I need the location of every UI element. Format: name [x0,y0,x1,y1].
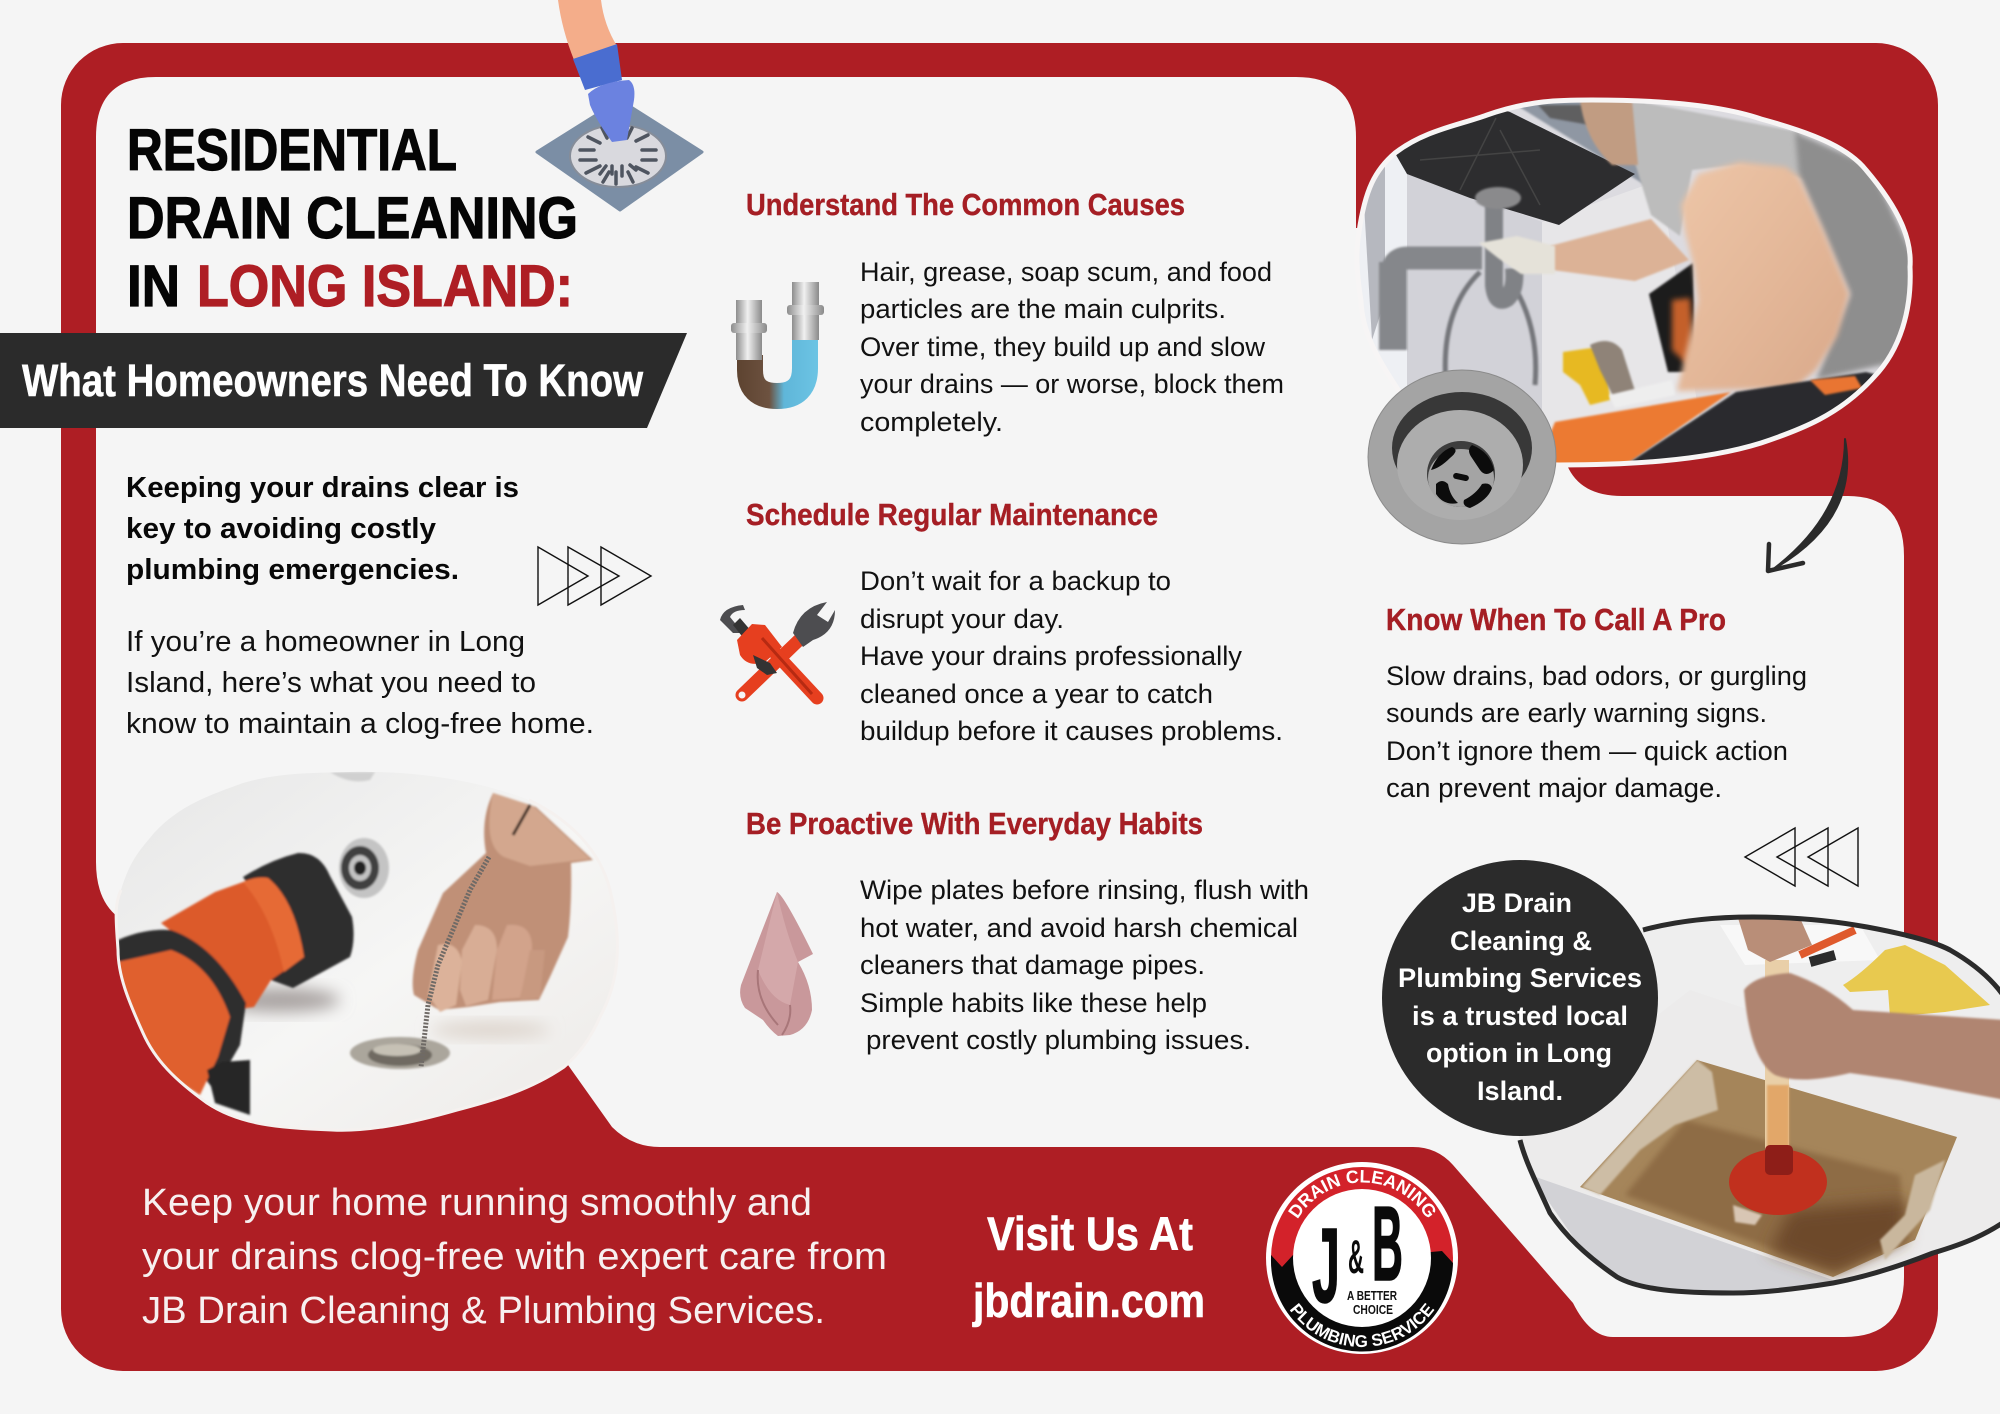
section: regular maintenance [720,497,1283,746]
text block: intro: Island, here’s what you need to [126,667,536,699]
text block: intro [126,626,594,740]
text block: lead: Keeping your drains clear is [126,472,519,504]
body: maintenance: cleaned once a year to catch [860,679,1213,709]
title: LONG ISLAND: [197,254,573,319]
body: causes: Hair, grease, soap scum, and food [860,257,1272,287]
photo: snake cable in sink drain [118,772,606,1129]
body: call a pro: sounds are early warning signs. [1386,698,1767,728]
logo: J&B Drain Cleaning & Plumbing Service: J [1312,1207,1340,1325]
icon: pink cloth [740,892,813,1036]
banner text: What Homeowners Need To Know [22,355,644,406]
text block: closing message: JB Drain Cleaning & Plumbing Services. [142,1290,825,1332]
title [127,118,578,319]
call to action: website: jbdrain.com [972,1274,1205,1327]
title: IN [127,254,180,319]
body: causes: completely. [860,407,1003,437]
body: habits: Wipe plates before rinsing, flush with [860,875,1309,905]
callout: trusted local option: Cleaning & [1450,926,1592,956]
body: habits: hot water, and avoid harsh chemical [860,913,1298,943]
body: habits [860,875,1309,1055]
callout: trusted local option: is a trusted local [1412,1001,1628,1031]
body: call a pro: can prevent major damage. [1386,773,1722,803]
body: maintenance: Have your drains professionally [860,641,1243,671]
logo: J&B Drain Cleaning & Plumbing Service: & [1348,1230,1364,1283]
logo: J&B Drain Cleaning & Plumbing Service [1266,1162,1458,1354]
logo: J&B Drain Cleaning & Plumbing Service: PLUMBING SERVICE [1290,1302,1434,1348]
logo: J&B Drain Cleaning & Plumbing Service: CHOICE [1353,1302,1393,1317]
heading: call a pro: Know When To Call A Pro [1386,602,1726,637]
title: DRAIN CLEANING [127,186,578,251]
icon: crossed wrenches [720,602,835,698]
logo: J&B Drain Cleaning & Plumbing Service: DRAIN CLEANING [1288,1170,1436,1218]
callout: trusted local option: Island. [1477,1076,1563,1106]
body: maintenance [860,566,1283,746]
icon: sink drain [1368,370,1556,544]
logo: J&B Drain Cleaning & Plumbing Service: B [1372,1185,1403,1303]
text block: closing message [142,1182,887,1332]
section: know when to call a pro [1386,602,1807,803]
text block: intro: If you’re a homeowner in Long [126,626,525,658]
body: habits: Simple habits like these help [860,988,1207,1018]
callout: trusted local option: option in Long [1426,1038,1612,1068]
call to action: website [972,1207,1205,1327]
call to action: website: Visit Us At [987,1207,1193,1260]
text block: intro: know to maintain a clog-free home. [126,708,594,740]
icon: triple arrows left [1745,828,1858,886]
icon: gloved hand on floor drain [537,0,702,210]
heading: maintenance: Schedule Regular Maintenance [746,497,1158,532]
banner [0,333,687,428]
section: common causes [731,187,1284,437]
body: causes: Over time, they build up and slow [860,332,1266,362]
body: causes: your drains — or worse, block them [860,369,1284,399]
icon: curved arrow [1768,439,1847,571]
text block: closing message: Keep your home running smoothly and [142,1182,812,1224]
body: causes [860,257,1284,437]
photo: plumber under sink [1350,95,1920,475]
heading: causes: Understand The Common Causes [746,187,1185,222]
text block: closing message: your drains clog-free with expert care from [142,1236,887,1278]
body: call a pro [1386,661,1807,803]
heading: habits: Be Proactive With Everyday Habits [746,806,1203,841]
text block: lead: key to avoiding costly [126,513,436,545]
logo: J&B Drain Cleaning & Plumbing Service: A BETTER [1347,1288,1397,1303]
body: maintenance: disrupt your day. [860,604,1064,634]
callout: trusted local option: JB Drain [1462,888,1572,918]
body: maintenance: Don’t wait for a backup to [860,566,1171,596]
section: everyday habits [740,806,1309,1055]
title: RESIDENTIAL [127,118,457,183]
body: call a pro: Don’t ignore them — quick action [1386,736,1788,766]
body: maintenance: buildup before it causes problems. [860,716,1283,746]
body: habits: cleaners that damage pipes. [860,950,1205,980]
callout: trusted local option: Plumbing Services [1398,963,1642,993]
callout: trusted local option [1382,860,1658,1136]
body: call a pro: Slow drains, bad odors, or gurgling [1386,661,1807,691]
text block: lead: plumbing emergencies. [126,554,459,586]
body: causes: particles are the main culprits. [860,294,1226,324]
icon: U-shaped pipe [731,282,824,396]
text block: lead [126,472,519,586]
photo: plunger in clogged sink [1520,920,2000,1290]
body: habits: prevent costly plumbing issues. [866,1025,1251,1055]
icon: triple arrows right [538,547,651,605]
